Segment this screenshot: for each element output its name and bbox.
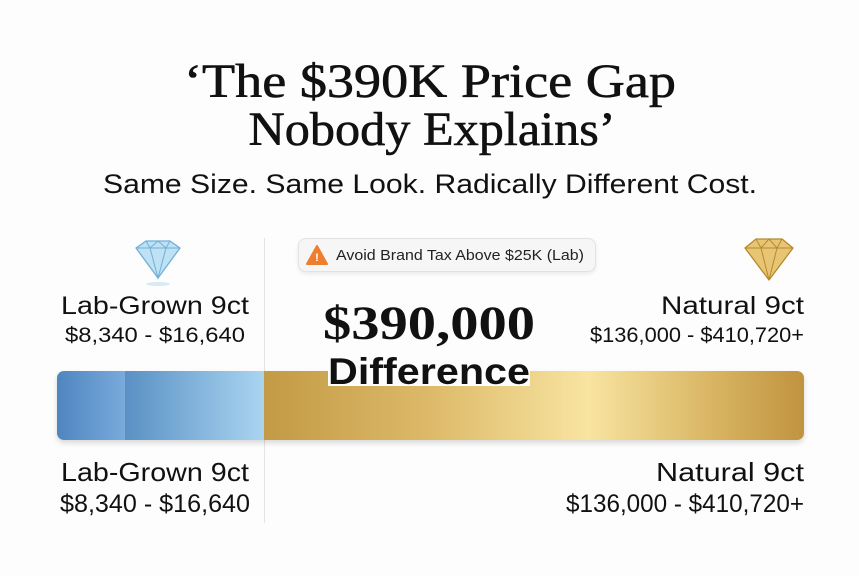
- label: natural top: [590, 292, 804, 347]
- bar: lab-grown range: [125, 371, 264, 440]
- bar: natural range: [264, 371, 804, 440]
- label: lab-grown top: Lab-Grown 9ct: [61, 292, 249, 320]
- label: natural bottom: $136,000 - $410,720+: [566, 490, 804, 518]
- label: lab-grown bottom: [60, 457, 250, 518]
- label: lab-grown bottom: $8,340 - $16,640: [60, 490, 250, 518]
- divider line: [264, 238, 265, 523]
- label: natural bottom: [566, 457, 805, 518]
- bar: lab-grown low segment: [57, 371, 125, 440]
- label: lab-grown top: [61, 292, 249, 347]
- callout: brand tax warning: !: [315, 252, 319, 264]
- title: ‘The $390K Price Gap: [184, 55, 676, 108]
- subtitle: Same Size. Same Look. Radically Different Cost.: [103, 169, 757, 199]
- icon: natural diamond: [744, 238, 794, 281]
- label: lab-grown bottom: Lab-Grown 9ct: [61, 457, 250, 487]
- label: natural bottom: Natural 9ct: [656, 457, 805, 487]
- icon: lab diamond: [135, 240, 181, 286]
- bar chart: price comparison: [57, 371, 804, 440]
- label: lab-grown top: $8,340 - $16,640: [65, 324, 245, 347]
- title: Nobody Explains’: [248, 103, 616, 156]
- headline number: $390,000: [323, 297, 535, 350]
- title: [184, 55, 676, 156]
- callout: brand tax warning: [298, 238, 596, 272]
- label: natural top: Natural 9ct: [661, 292, 804, 320]
- label: natural top: $136,000 - $410,720+: [590, 324, 804, 347]
- callout: brand tax warning: Avoid Brand Tax Above $25K (Lab): [336, 248, 584, 264]
- headline number: [323, 297, 535, 390]
